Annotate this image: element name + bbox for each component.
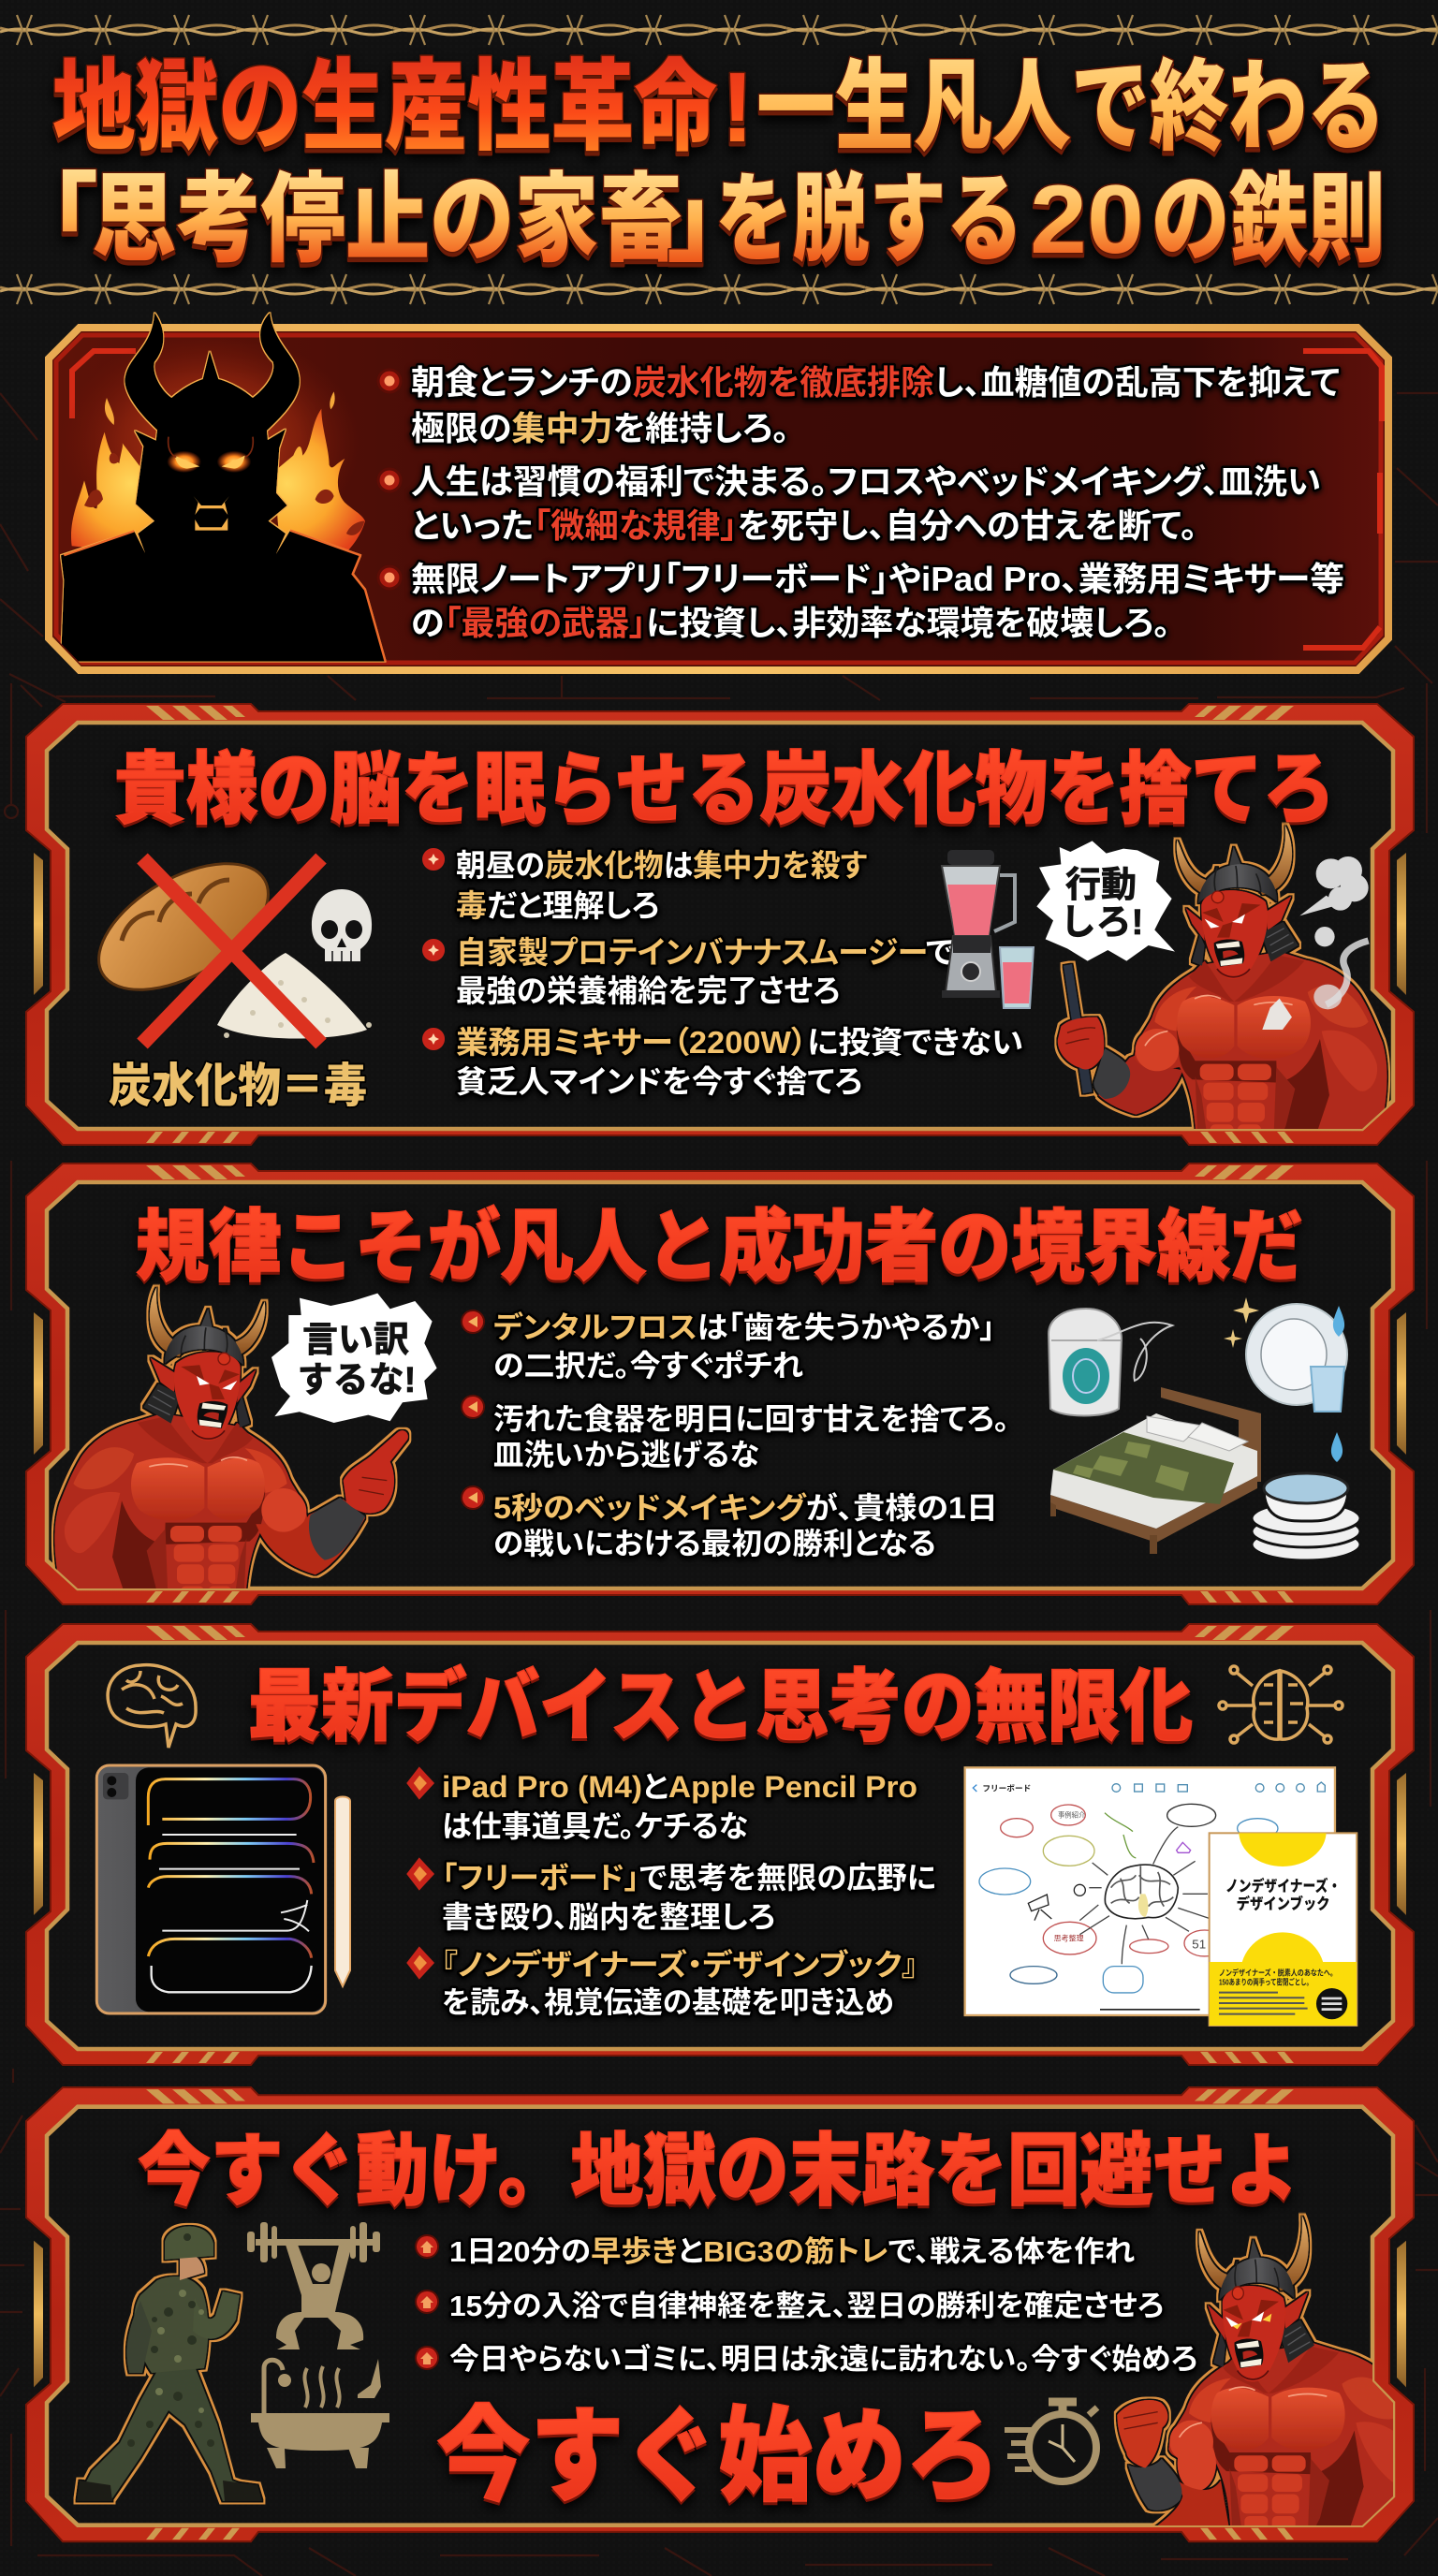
hero bullet 1 (378, 370, 401, 392)
title line 2: を脱する (715, 166, 1023, 274)
panel: hero summary (49, 313, 1388, 670)
hero text 2: といった「微細な規律」を死守し、自分への甘えを断て。 (411, 506, 1197, 545)
bullet list: devices: 「フリーボード」で思考を無限の広野に (442, 1861, 936, 1895)
hero bullet 2 (378, 469, 401, 491)
bullet list: devices: 書き殴り、脳内を整理しろ (442, 1900, 775, 1934)
character: demon pointing (54, 1287, 408, 1613)
bullet list: discipline: 皿洗いから逃げるな (493, 1438, 759, 1471)
image: Freeform mind map screenshot: 思考整理 (1054, 1933, 1084, 1942)
speech burst: 行動 (1065, 866, 1137, 905)
icon: red cross (142, 858, 321, 1044)
title line 2: の鉄則 (1152, 166, 1386, 274)
icon: rice pile (217, 953, 372, 1039)
title line 2: 思考停止の家畜 (92, 166, 683, 274)
character: soldier walking (77, 2226, 262, 2501)
heading: 貴様の脳を眠らせる炭水化物を捨てろ (114, 745, 1335, 833)
image: Freeform mind map screenshot (965, 1767, 1335, 2015)
image: book cover (1208, 1832, 1357, 2027)
big call to action: 今すぐ始めろ (436, 2399, 1000, 2514)
panel: carbs (26, 704, 1414, 1151)
icon: stopwatch (1005, 2402, 1097, 2481)
hero bullet 3 (378, 566, 401, 589)
title line 2 (1, 166, 1386, 274)
heading: 今すぐ動け。地獄の末路を回避せよ (138, 2127, 1299, 2215)
bullet list: act now (416, 2235, 1197, 2376)
speech burst: 言い訳 (302, 1321, 409, 1360)
hero text 3: の「最強の武器」に投資し、非効率な環境を破壊しろ。 (411, 604, 1170, 642)
bullet list: discipline (462, 1310, 1009, 1560)
heading: 最新デバイスと思考の無限化 (248, 1662, 1193, 1750)
image: Freeform mind map screenshot: 51 (1192, 1938, 1206, 1952)
icon: bathtub (251, 2359, 389, 2468)
bullet list: devices: iPad Pro (M4) とApple Pencil Pro (442, 1770, 917, 1804)
title (1, 52, 1386, 274)
icon: dental floss (1049, 1309, 1172, 1415)
bullet list: discipline: 汚れた食器を明日に回す甘えを捨てろ。 (493, 1402, 1009, 1436)
barbed wire top (0, 11, 1438, 49)
image: book cover: ノンデザイナーズ・ (1225, 1877, 1341, 1895)
speech burst: するな! (298, 1361, 416, 1400)
speech burst (271, 1294, 437, 1423)
image: book cover: デザインブック (1237, 1894, 1330, 1912)
panel: discipline (26, 1164, 1414, 1613)
image: book cover: 150あまりの両手って密閉ごとし。 (1219, 1977, 1313, 1987)
image: Freeform mind map screenshot: 事例紹介 (1058, 1811, 1086, 1820)
bullet list: act now: 今日やらないゴミに、明日は永遠に訪れない。今すぐ始めろ (449, 2343, 1197, 2376)
hero text 1: 極限の集中力を維持しろ。 (411, 409, 789, 447)
icon: plate and glass (1224, 1297, 1347, 1412)
icon: bowls (1252, 1432, 1360, 1560)
hero text 1: 朝食とランチの炭水化物を徹底排除し、血糖値の乱高下を抑えて (411, 363, 1340, 402)
speech burst (1036, 841, 1175, 961)
title line 2: 20 (1030, 166, 1144, 274)
bullet list: discipline: の戦いにおける最初の勝利となる (493, 1527, 936, 1560)
icon: iPad Pro (96, 1765, 326, 2013)
title line 2: 「 (1, 166, 98, 274)
bullet list: carbs: 自家製プロテインバナナスムージーで (456, 935, 954, 970)
bullet list: discipline: の二択だ。今すぐポチれ (493, 1349, 803, 1383)
title line 2: 」 (667, 166, 764, 274)
bullet list: carbs: 毒だと理解しろ (456, 888, 659, 923)
hero text 3: 無限ノートアプリ「フリーボード」やiPad Pro、業務用ミキサー等 (411, 560, 1344, 598)
icon: weightlifter (247, 2222, 380, 2349)
character: demon holding stick (1058, 826, 1387, 1151)
bullet list: discipline: 5秒のベッドメイキング が、貴様の1日 (493, 1491, 998, 1525)
panel: devices (26, 1624, 1414, 2065)
bullet list: discipline: デンタルフロスは「歯を失うかやるか」 (493, 1310, 995, 1344)
label: carbs are poison: 炭水化物＝毒 (109, 1060, 367, 1112)
icon: skull (312, 889, 372, 961)
hero text 3 (411, 560, 1344, 642)
bullet list: devices: は仕事道具だ。ケチるな (442, 1809, 748, 1843)
icon: camo bed (1050, 1387, 1261, 1554)
hero text 1 (411, 363, 1340, 447)
image: Freeform mind map screenshot: フリーボード (982, 1782, 1031, 1793)
speech burst: しろ! (1061, 903, 1143, 943)
bullet list: carbs (422, 848, 1023, 1099)
title line 1: 地獄の生産性革命 (52, 52, 717, 163)
title line 1 (52, 52, 1386, 163)
bullet list: carbs: 最強の栄養補給を完了させろ (456, 973, 840, 1008)
heading: 規律こそが凡人と成功者の境界線だ (136, 1203, 1303, 1291)
bullet list: carbs: 朝昼の炭水化物は集中力を殺す (456, 848, 867, 883)
hero text 2: 人生は習慣の福利で決まる。フロスやベッドメイキング、皿洗い (411, 462, 1321, 501)
icon: flaming devil silhouette (61, 313, 386, 662)
image: book cover: ノンデザイナーズ・脱素人のあなたへ。 (1219, 1968, 1337, 1978)
bullet list: devices (410, 1770, 936, 2019)
bullet list: act now: 15分の入浴で自律神経を整え、翌日の勝利を確定させろ (449, 2290, 1164, 2322)
icon: circuit brain (1219, 1666, 1343, 1743)
icon: Apple Pencil (335, 1797, 350, 1986)
character: demon with raised fist (1114, 2213, 1393, 2525)
panel: act now (26, 2087, 1421, 2543)
icon: blender and glass (942, 850, 1034, 1008)
barbed wire below title (0, 271, 1438, 308)
title line 1: ! (721, 52, 754, 163)
bullet list: carbs: 業務用ミキサー（2200W） に投資できない (456, 1025, 1023, 1060)
hero text 2 (411, 462, 1321, 545)
icon: brain outline (108, 1665, 196, 1748)
icon: bread (78, 838, 289, 1016)
bullet list: act now: 1日20分の早歩きとBIG3の筋トレ で、戦える体を作れ (449, 2235, 1135, 2268)
icon: steam clouds (1262, 856, 1369, 1030)
bullet list: devices: を読み、視覚伝達の基礎を叩き込め (442, 1985, 894, 2019)
bullet list: devices: 『ノンデザイナーズ・デザインブック』 (442, 1948, 917, 1982)
bullet list: carbs: 貧乏人マインドを今すぐ捨てろ (456, 1064, 862, 1099)
demon yellow eyes (1233, 2314, 1271, 2329)
